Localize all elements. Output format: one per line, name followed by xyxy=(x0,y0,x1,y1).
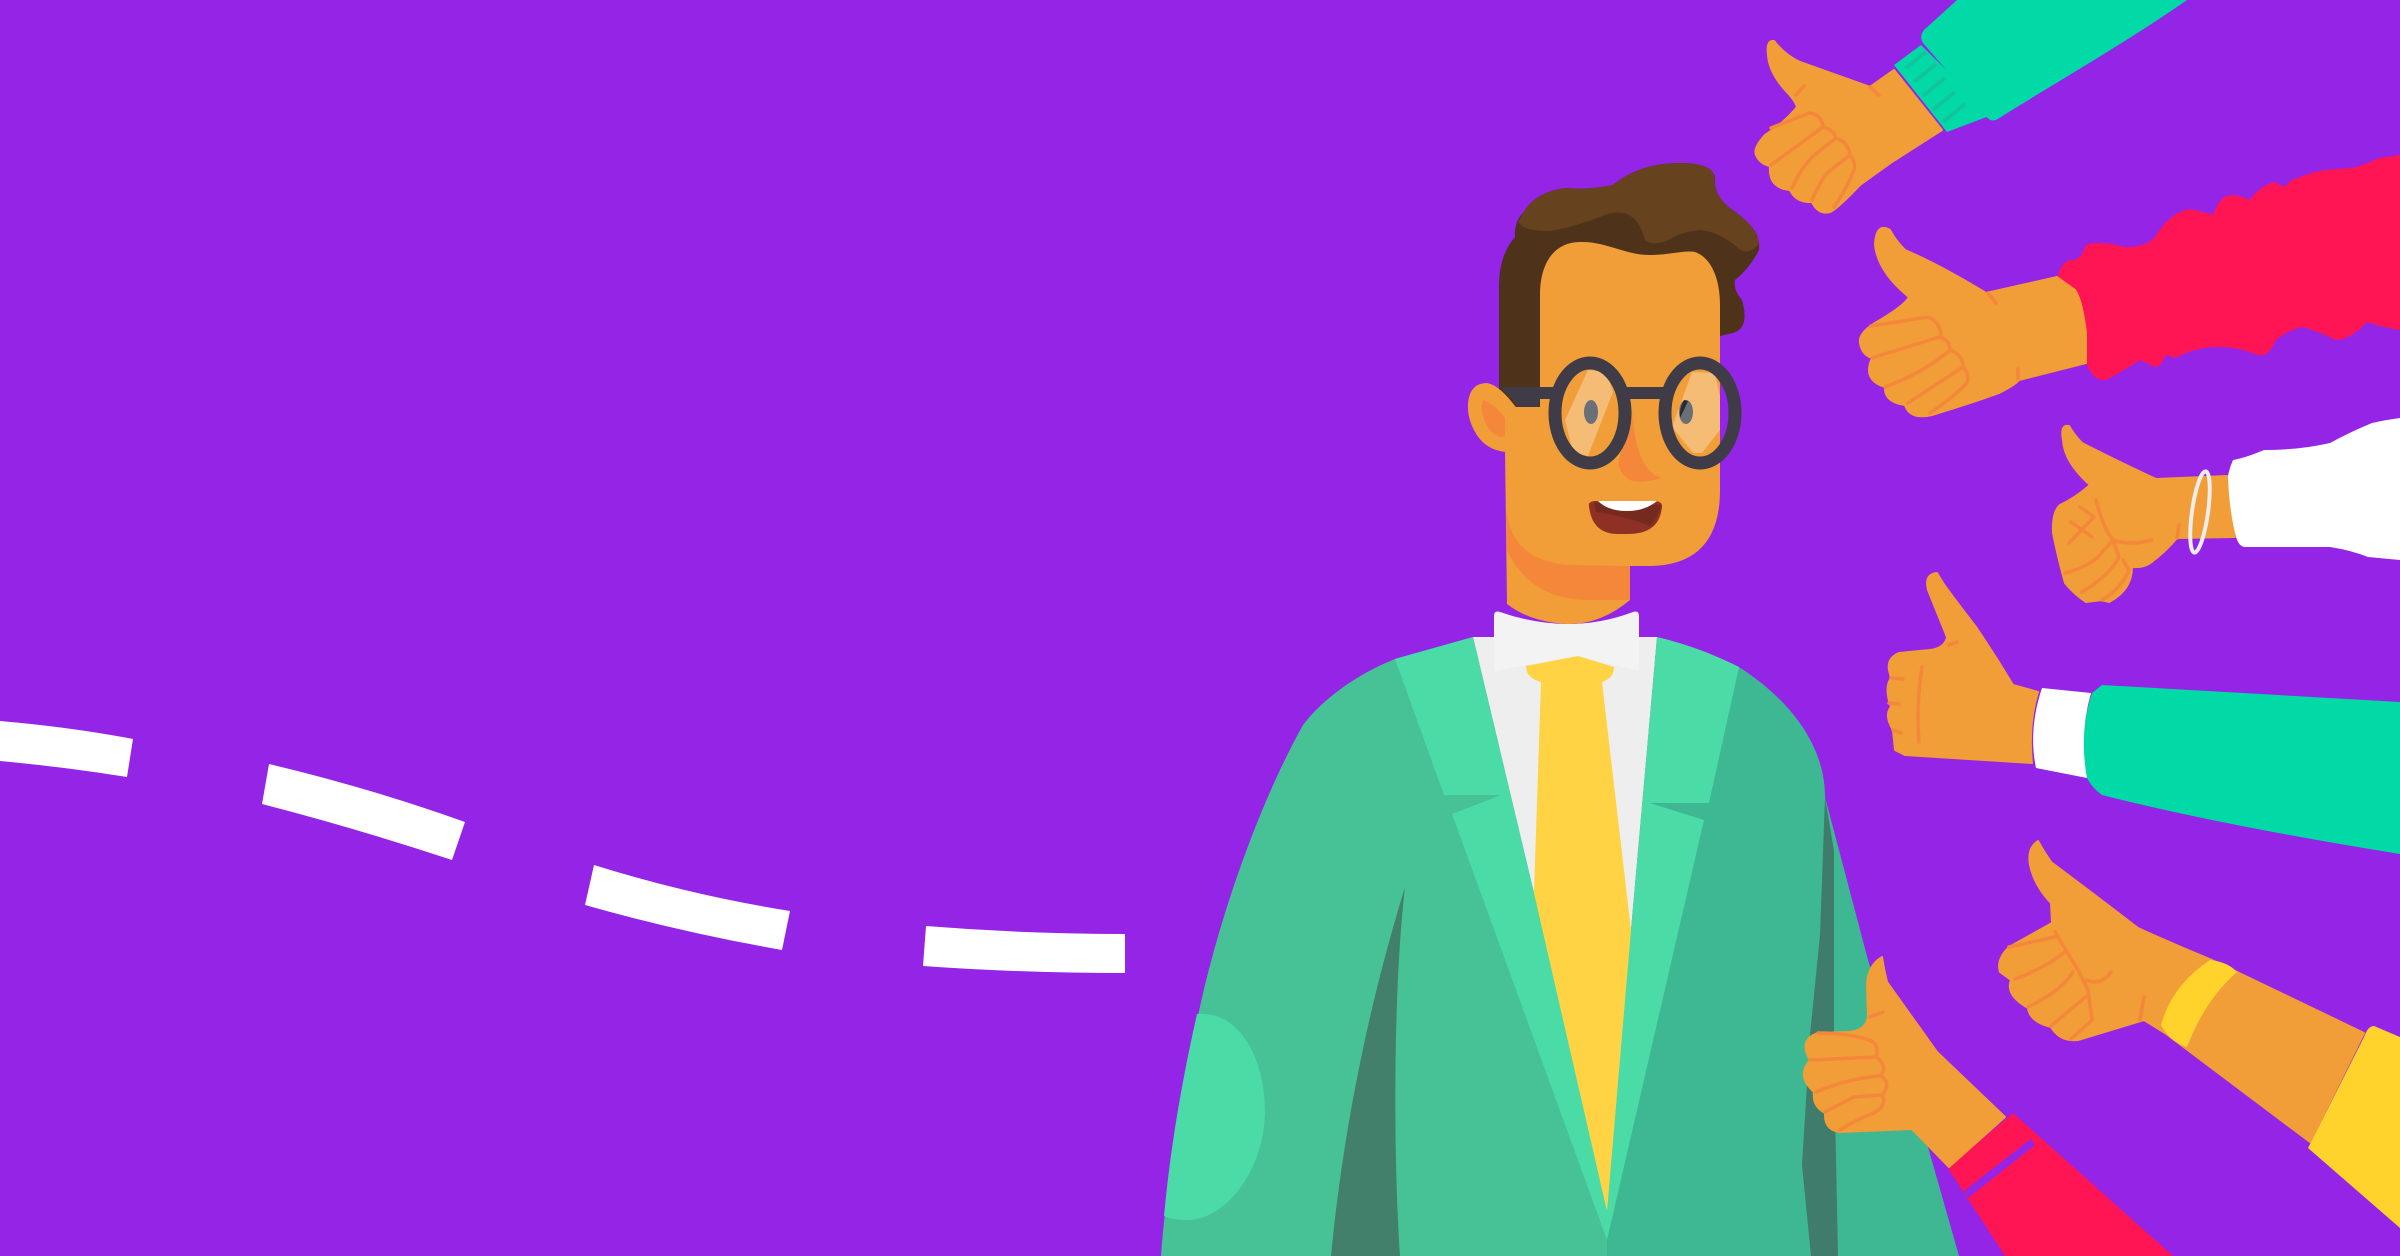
elbow patch xyxy=(1164,1014,1265,1220)
hand: yellow sleeve and band xyxy=(1999,841,2400,1228)
hand xyxy=(1860,228,2086,416)
hand: red sleeve at jacket xyxy=(1804,957,2173,1256)
bracelet xyxy=(2186,470,2214,554)
collar xyxy=(1494,612,1639,671)
sleeve stripe xyxy=(1964,1139,2035,1198)
right jacket fold xyxy=(1802,797,1838,1256)
bridge and temple xyxy=(1500,387,1665,407)
hand: red sleeve xyxy=(1860,155,2400,416)
dashed path xyxy=(0,721,1125,973)
left lapel xyxy=(1395,637,1607,1240)
red wavy sleeve xyxy=(2057,155,2400,380)
man xyxy=(1161,163,1959,1256)
hand xyxy=(2053,426,2235,602)
yellow sleeve xyxy=(2308,1026,2400,1228)
hand xyxy=(1755,41,1942,213)
hand: white sleeve with bracelet xyxy=(2053,418,2400,602)
mouth xyxy=(1589,501,1662,534)
hand xyxy=(1804,957,2005,1167)
teal sleeve xyxy=(1921,0,2187,120)
inner ear xyxy=(1482,400,1509,437)
tie xyxy=(1526,656,1631,1211)
left eye xyxy=(1584,400,1598,424)
left jacket fold xyxy=(1331,887,1405,1256)
right eye xyxy=(1679,400,1693,424)
teal sleeve xyxy=(2083,685,2400,854)
hair xyxy=(1499,163,1759,407)
teeth xyxy=(1598,501,1657,511)
white cuff xyxy=(2033,688,2091,778)
face and neck xyxy=(1505,242,1720,624)
yellow band xyxy=(2161,960,2237,1047)
right lapel xyxy=(1607,637,1739,1240)
shirt xyxy=(1473,637,1657,1211)
ear xyxy=(1468,383,1518,452)
hand: top teal sleeve xyxy=(1755,0,2187,213)
neck shadow xyxy=(1506,510,1630,600)
hand and arm xyxy=(1999,841,2364,1142)
nose xyxy=(1618,410,1662,482)
red sleeve xyxy=(1948,1113,2173,1256)
hand: teal sleeve with white cuff xyxy=(1888,573,2400,854)
frames xyxy=(1555,363,1735,463)
lens tint xyxy=(1555,364,1625,462)
hand xyxy=(1888,573,2038,763)
glasses xyxy=(1500,363,1735,463)
white sleeve xyxy=(2227,418,2400,560)
suit jacket xyxy=(1161,637,1959,1256)
ribbed cuff xyxy=(1894,45,1992,132)
